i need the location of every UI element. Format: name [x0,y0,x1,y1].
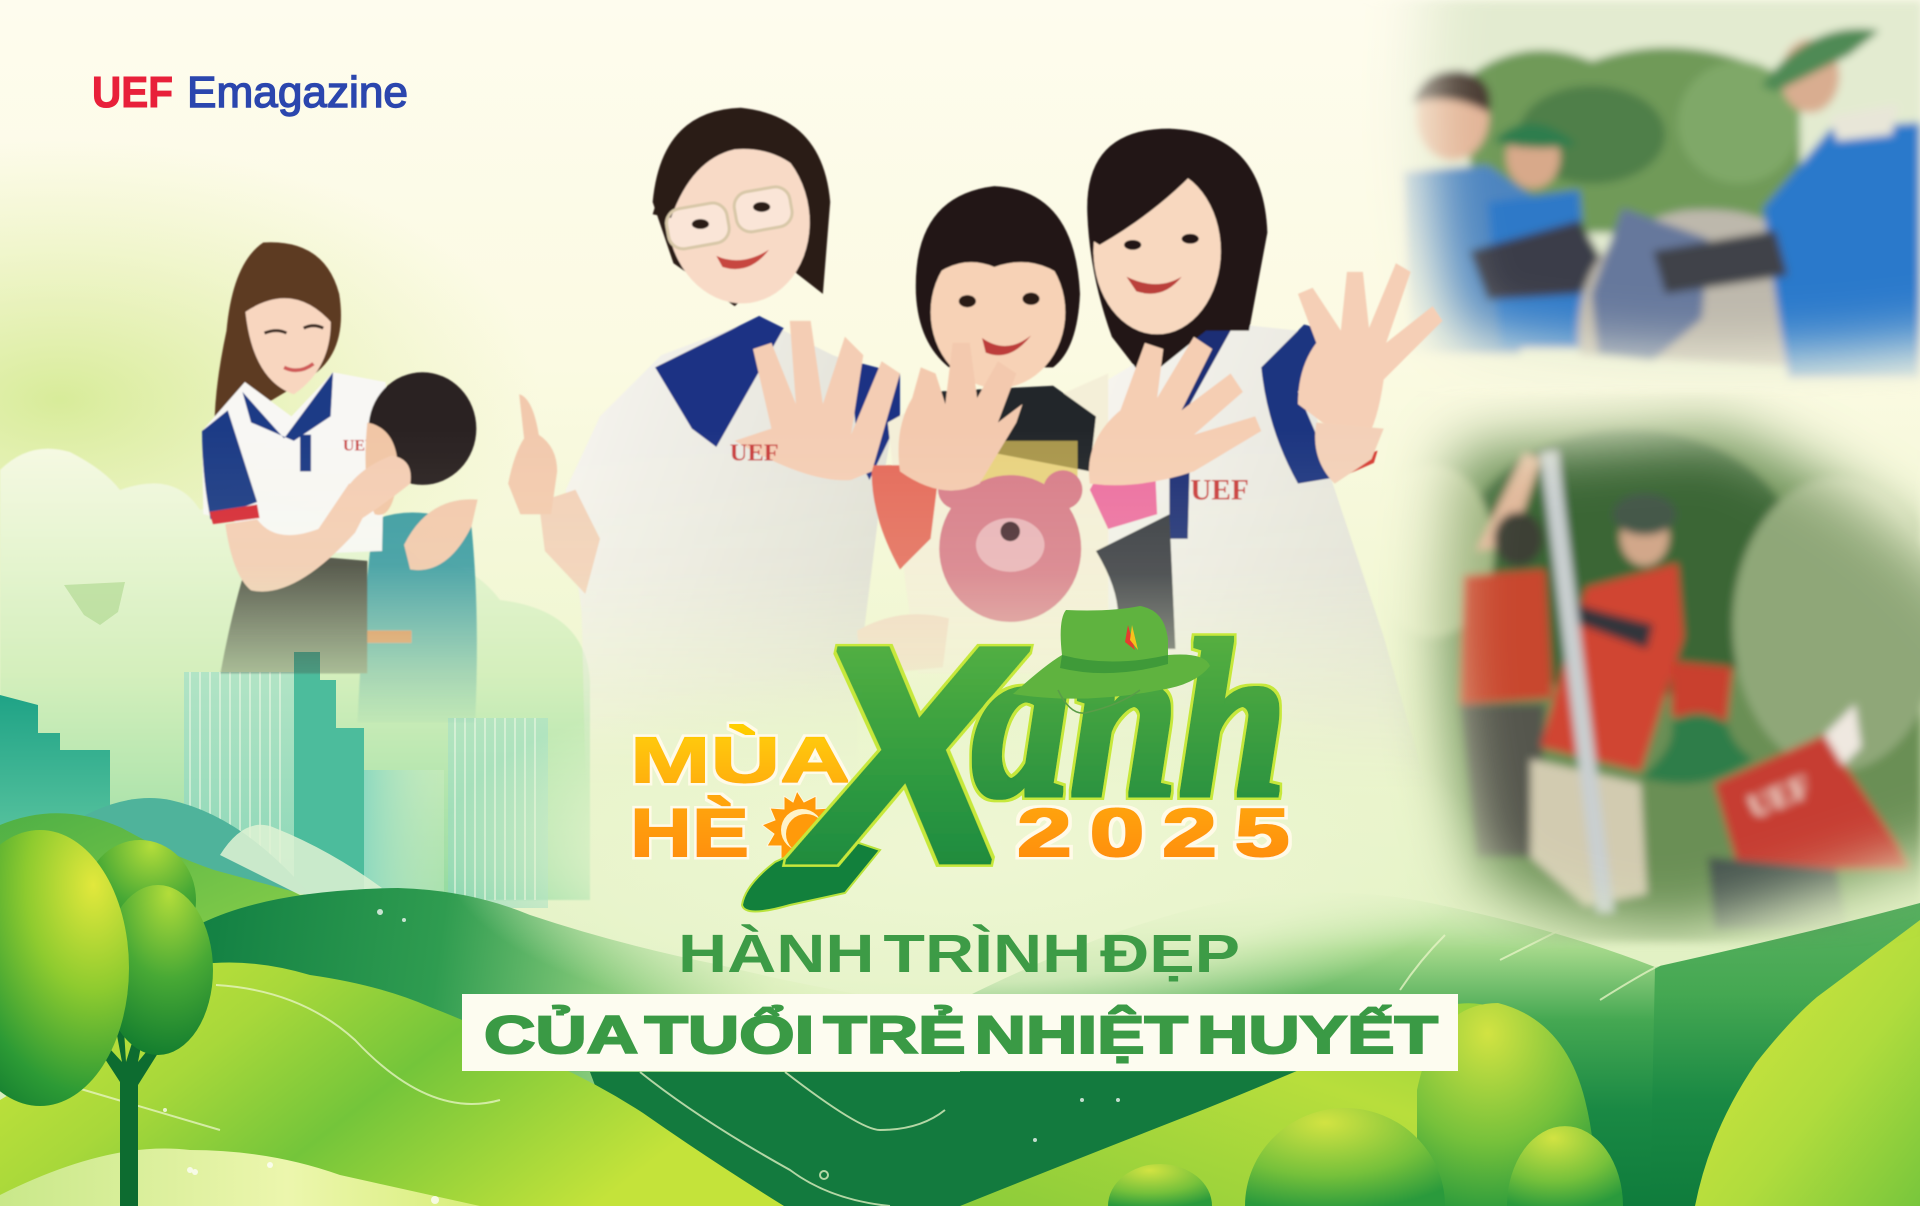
woman face [245,293,331,394]
photo: volunteers raising a pole: UEF [1743,768,1815,824]
big tree crown [0,830,129,1106]
left arm thumbs up [539,490,600,594]
text: 2025: 2025 [1017,794,1290,870]
photo: volunteers mixing cement [1400,0,1920,384]
three students waving: UEF [1190,475,1249,507]
checker accent [64,582,125,625]
text: HÈ: HÈ [630,795,749,871]
icon: green hat [1013,606,1210,713]
student right body [1108,324,1399,708]
hands [350,456,412,518]
woman shirt [202,372,386,553]
boy head [369,372,476,485]
text: MÙA: MÙA [630,724,850,796]
woman hair back [214,241,342,417]
woman and boy photo [202,242,478,722]
text: X: X [771,582,1053,928]
left trees [0,830,213,1206]
sleeve arm [1469,220,1604,300]
person right [1763,122,1920,380]
three students waving [508,106,1442,740]
waving hands [735,321,900,480]
person back [1488,190,1592,349]
pole [1540,451,1614,912]
city skyline [0,652,548,910]
centre pale wash behind title [440,660,1480,1040]
hills left [0,798,1040,1206]
right upper hill [590,892,1920,1206]
woman arm [225,484,377,591]
banner: CỦA TUỔI TRẺ NHIỆT HUYẾT [462,994,1458,1071]
worker center [1540,563,1684,771]
photo: volunteers raising a pole [1347,392,1920,943]
student right head [1087,129,1267,380]
icon: sun [762,791,838,866]
woman and boy photo: UEF [343,438,375,455]
student middle tee [888,373,1108,673]
boy body [358,513,477,722]
three students waving: UEF [730,439,779,466]
text: anh: anh [972,594,1287,844]
brush tail of the X [742,835,880,912]
banner: CỦA TUỔI TRẺ NHIỆT HUYẾT: CỦA TUỔI TRẺ NHIỆT HUYẾT [484,1004,1438,1065]
hill route lines and sparkles [74,909,1660,1206]
woman skirt [220,551,367,673]
tree trunk [94,1030,170,1206]
worker front [1714,735,1910,869]
worker left [1460,569,1553,704]
logo: UEF Emagazine [92,68,408,117]
clouds [0,449,590,900]
right front hills and bushes [960,920,1920,1206]
back tree crown [84,840,196,960]
worker far [1671,661,1733,722]
logo: UEF Emagazine: Emagazine [187,68,408,117]
person left [1402,159,1534,358]
student middle head [916,186,1080,367]
mid tree crown [103,885,213,1055]
student left body [566,318,900,882]
student left head [653,108,830,306]
cement tank and sack [1578,210,1812,367]
subtitle: HÀNH TRÌNH ĐẸP: HÀNH TRÌNH ĐẸP [678,924,1240,984]
title logo: Mùa Hè Xanh 2025 [630,582,1290,928]
logo: UEF Emagazine: UEF [92,68,173,117]
hills left front [0,962,784,1206]
